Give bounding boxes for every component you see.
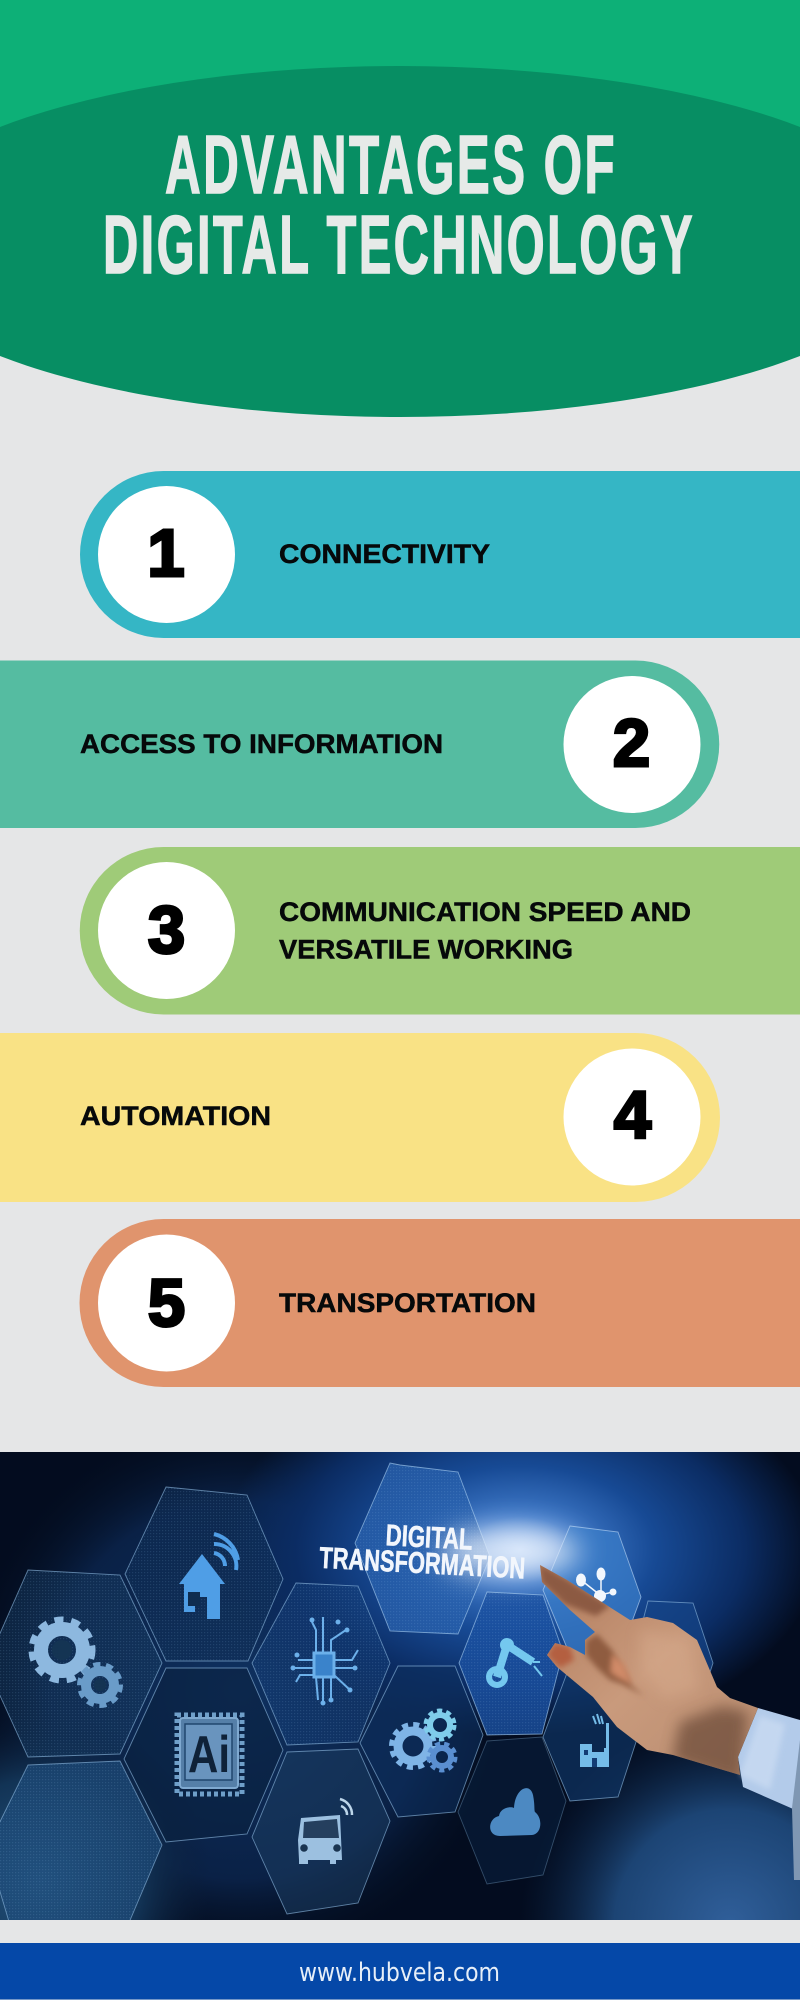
number badge 1	[98, 486, 235, 623]
central glow	[440, 1528, 580, 1576]
icon: factory	[580, 1714, 609, 1767]
heading text in photo: TRANSFORMATION	[319, 1542, 526, 1586]
footer bar	[0, 1943, 800, 2000]
icon: circuit chip	[290, 1617, 358, 1706]
number badge 3: 3	[148, 893, 185, 968]
icon: gears	[32, 1620, 120, 1705]
icon: smart home	[179, 1534, 238, 1619]
hand pointing	[540, 1565, 758, 1785]
label: connectivity: CONNECTIVITY	[279, 539, 490, 569]
label: automation: AUTOMATION	[80, 1101, 271, 1131]
number badge 1: 1	[147, 516, 185, 591]
label: transportation: TRANSPORTATION	[279, 1288, 536, 1318]
header band	[0, 0, 800, 240]
number badge 2: 2	[613, 706, 650, 781]
dot texture	[0, 1463, 563, 1925]
number badge 2	[564, 676, 700, 813]
number badge 5: 5	[148, 1266, 185, 1341]
number badge 4: 4	[614, 1078, 651, 1153]
icon: gears small	[392, 1711, 455, 1770]
number badge 5	[98, 1234, 235, 1372]
panel: 3 communication speed	[80, 847, 800, 1014]
icon: network	[576, 1568, 616, 1602]
label: communication speed and versatile working: COMMUNICATION SPEED AND	[279, 897, 691, 927]
footer url: www.hubvela.com	[299, 1958, 500, 1988]
icon: robot arm	[489, 1640, 542, 1685]
icon: AI chip: Ai	[188, 1726, 230, 1784]
title	[103, 118, 695, 291]
label: access to information: ACCESS TO INFORMATION	[80, 729, 443, 759]
heading text in photo: DIGITAL	[385, 1519, 473, 1557]
heading text in photo	[320, 1524, 524, 1579]
panel: 4 automation	[0, 1033, 720, 1202]
panel: 2 access to information	[0, 660, 719, 828]
shirt cuff	[738, 1708, 800, 1880]
icon: cloud	[490, 1788, 540, 1836]
header ellipse	[0, 66, 800, 417]
panel: 5 transportation	[80, 1219, 800, 1387]
hexagon grid	[0, 1463, 713, 1925]
number badge 3	[98, 862, 235, 999]
panel: 1 connectivity	[80, 471, 800, 638]
icon: connected car	[298, 1799, 352, 1864]
label: communication speed and versatile working: VERSATILE WORKING	[279, 934, 573, 964]
photo: digital transformation	[0, 1452, 800, 1925]
number badge 4	[564, 1048, 700, 1186]
label: communication speed and versatile working	[279, 897, 691, 964]
icon: AI chip	[177, 1715, 242, 1794]
